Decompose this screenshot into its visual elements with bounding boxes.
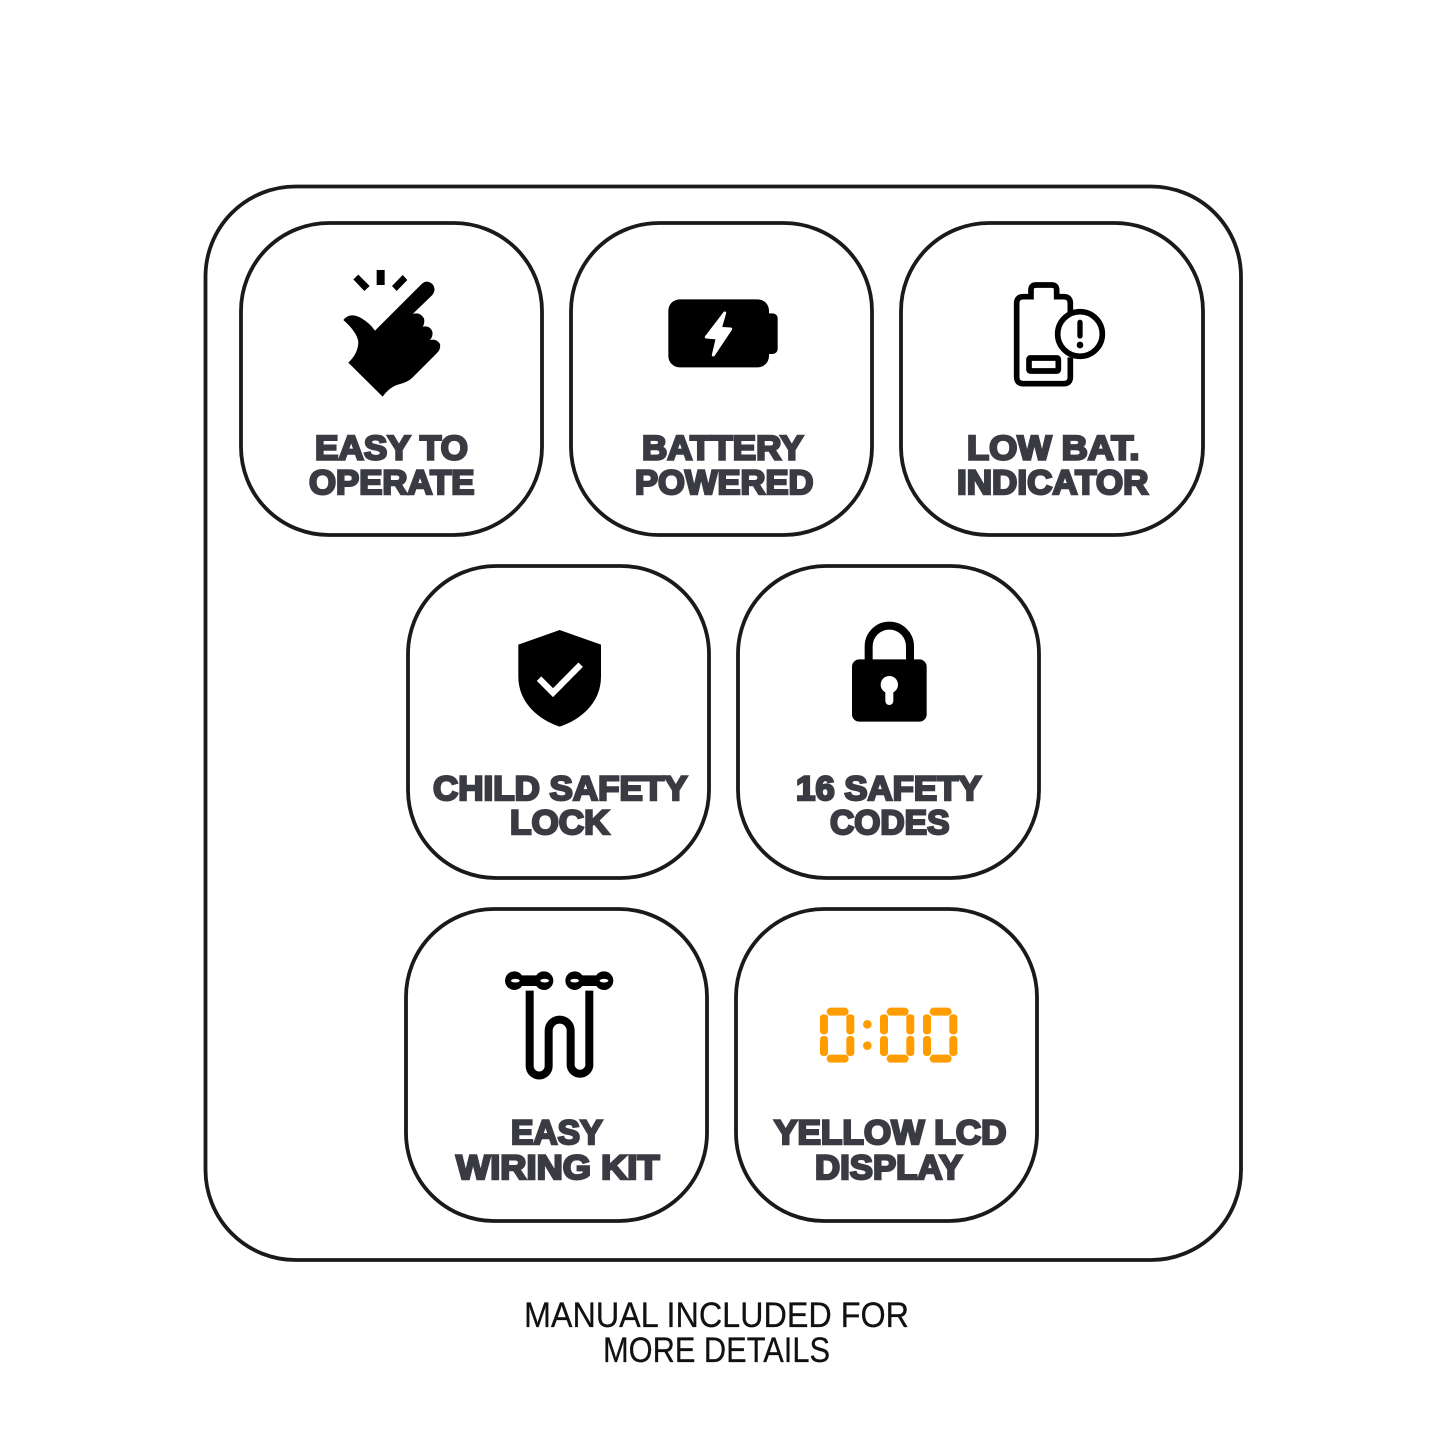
panel: outer rounded frame [206,186,1241,1260]
label: easy to operate: OPERATE [309,464,474,502]
label: battery powered: POWERED [635,464,814,502]
panel: easy wiring kit [406,909,707,1221]
label: child safety lock [433,770,688,842]
footer note: MANUAL INCLUDED FOR [524,1296,909,1335]
panel: low battery indicator [901,223,1203,535]
panel: battery powered [571,223,872,535]
panel: 16 safety codes [738,566,1039,878]
label: yellow lcd display [774,1114,1006,1187]
label: 16 safety codes [796,770,982,842]
icon: tapping hand [343,270,440,397]
label: low bat. indicator [957,430,1149,502]
icon: lcd readout 0:00 [820,1008,957,1063]
panel: easy to operate [241,223,542,535]
label: easy wiring kit: WIRING KIT [456,1149,660,1187]
label: child safety lock: CHILD SAFETY [433,770,688,808]
icon: shield with check [518,630,601,727]
panel: child safety lock [408,566,709,878]
panel: yellow lcd display [736,909,1037,1221]
label: low bat. indicator: INDICATOR [957,464,1149,502]
icon: charged battery [668,299,778,367]
label: yellow lcd display: YELLOW LCD [774,1114,1006,1152]
label: 16 safety codes: CODES [830,804,950,842]
label: 16 safety codes: 16 SAFETY [796,770,982,808]
icon: padlock [852,626,927,722]
label: easy to operate: EASY TO [315,430,468,468]
label: yellow lcd display: DISPLAY [815,1149,962,1187]
label: easy wiring kit [456,1114,660,1187]
footer note [524,1296,909,1370]
label: easy wiring kit: EASY [511,1114,602,1152]
label: child safety lock: LOCK [510,804,610,842]
icon: wiring kit [505,971,613,1075]
label: low bat. indicator: LOW BAT. [967,430,1140,468]
footer note: MORE DETAILS [603,1331,830,1370]
label: battery powered: BATTERY [642,430,804,468]
label: easy to operate [309,430,474,502]
icon: low battery with alert [1017,285,1102,384]
label: battery powered [635,430,814,502]
